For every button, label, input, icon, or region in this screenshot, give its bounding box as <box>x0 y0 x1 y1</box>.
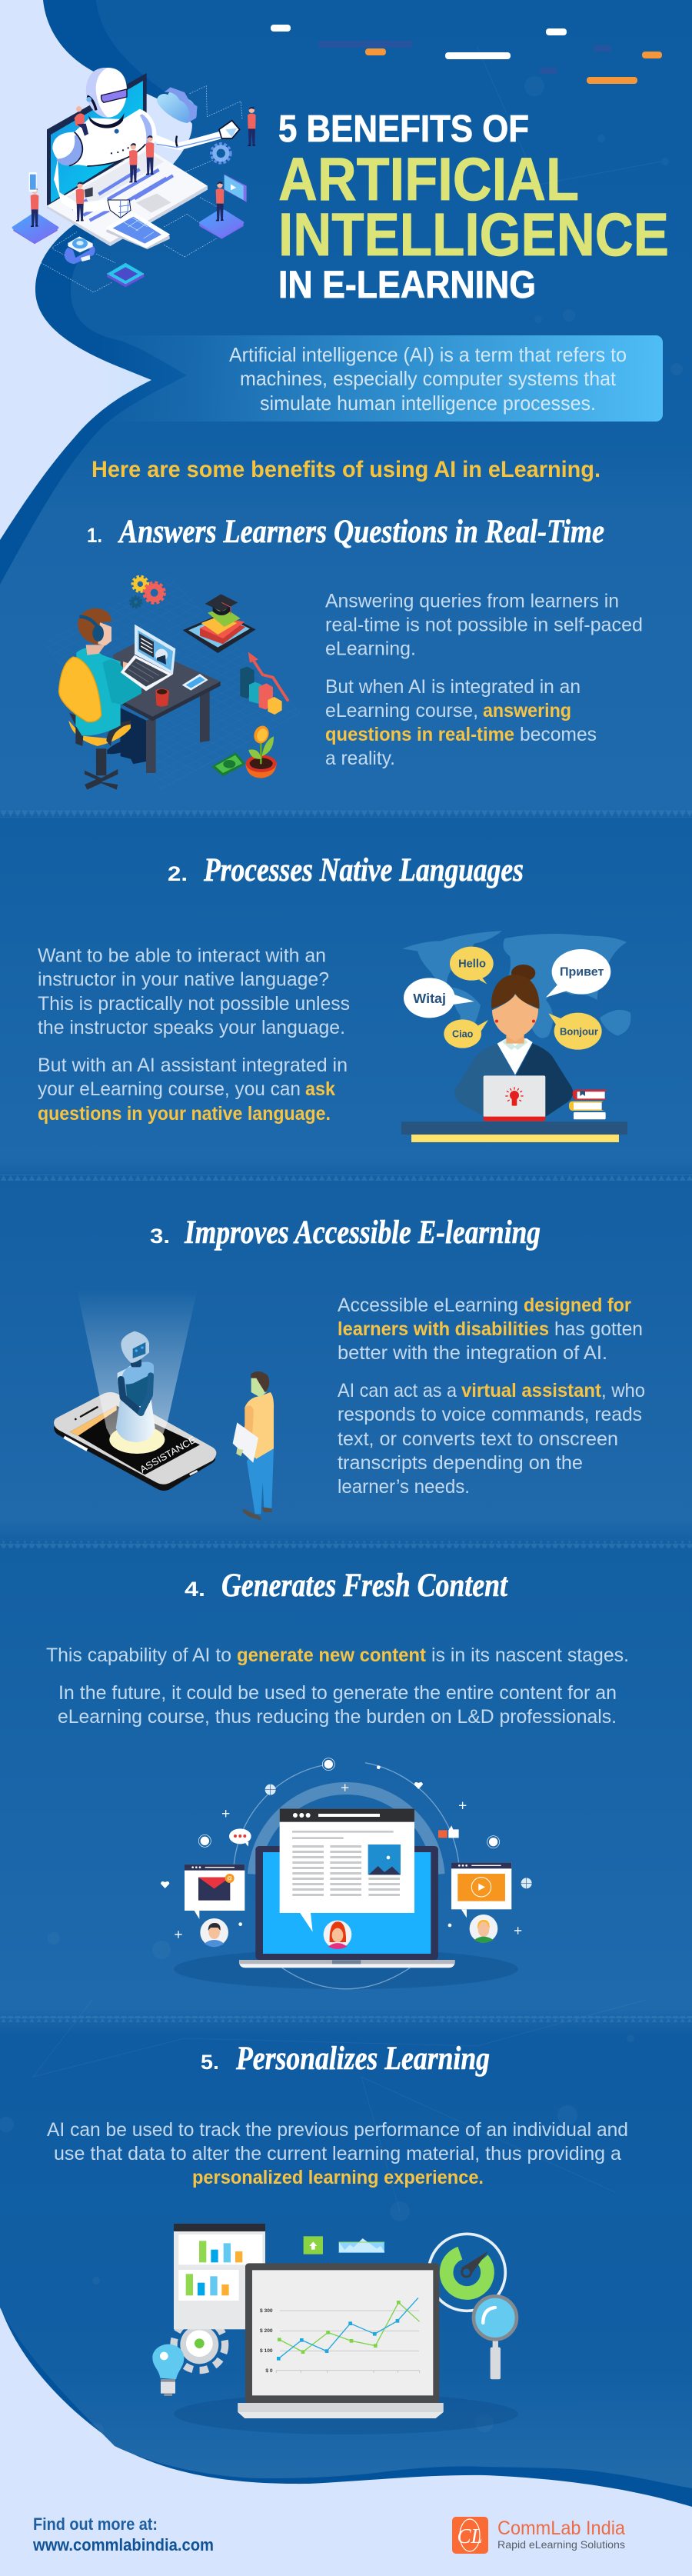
logo wordmark: CommLab India <box>497 2518 625 2539</box>
learner head with headset <box>78 608 111 655</box>
section 1 text: a reality. <box>325 748 395 769</box>
section 3 text: text, or converts text to onscreen <box>338 1428 618 1450</box>
platform: right <box>199 210 244 239</box>
speech bubble: Witaj: Witaj <box>413 991 446 1006</box>
gear icon <box>211 144 230 162</box>
title <box>278 108 669 306</box>
callout: definition of AI: machines, especially computer systems that <box>240 367 617 390</box>
lightbulb <box>152 2344 184 2396</box>
section 2 text: questions in your native language. <box>38 1103 331 1125</box>
small phone icon <box>29 172 37 192</box>
standing man <box>233 1371 274 1521</box>
ground shadow <box>174 1949 518 1989</box>
plant with coin and money <box>211 724 277 778</box>
section 2 text: ask <box>305 1078 335 1100</box>
speedometer gauge <box>428 2234 505 2311</box>
orbit arcs <box>234 1763 459 1989</box>
section 3 text: Accessible eLearning <box>338 1295 518 1316</box>
section 2 text: But with an AI assistant integrated in <box>38 1055 348 1076</box>
section 3 text: responds to voice commands, reads <box>338 1404 642 1425</box>
title line: In E-Learning: IN E-LEARNING <box>278 263 536 306</box>
logo tagline: Rapid eLearning Solutions <box>497 2538 625 2551</box>
small widgets <box>304 2236 384 2254</box>
section 2 illustration: instructor speaking many languages <box>401 931 630 1142</box>
section 2 text <box>38 945 350 1125</box>
speech bubble: Ciao: Ciao <box>452 1029 474 1040</box>
report panel <box>174 2224 265 2329</box>
section 3 text: has gotten <box>554 1318 643 1340</box>
phone body <box>54 1392 216 1491</box>
laptop on desk <box>121 625 175 691</box>
section 3 text: learners with disabilities <box>338 1318 549 1340</box>
watch icon <box>65 236 95 264</box>
laptop with lightbulb <box>484 1075 545 1121</box>
section 3 heading: Improves Accessible E-learning <box>184 1215 541 1251</box>
section 5 text <box>47 2119 628 2188</box>
bar chart with arrow <box>240 651 288 715</box>
section 5 text: AI can be used to track the previous performance of an individual and <box>47 2119 628 2141</box>
section 4 text: is in its nascent stages. <box>431 1645 629 1666</box>
analytics laptop <box>238 2263 444 2418</box>
smartphone on laptop <box>106 213 170 249</box>
video window <box>451 1862 511 1918</box>
section 3 text: , who <box>601 1380 645 1401</box>
speech bubble: Ciao <box>444 1019 488 1048</box>
title line: Artificial: ARTIFICIAL <box>278 145 579 213</box>
section 1 text: answering <box>483 700 571 721</box>
line chart: $ 200 <box>260 2328 273 2334</box>
monitor screen <box>47 73 147 208</box>
hero illustration: robot emerging from laptop <box>13 68 256 292</box>
main content window <box>280 1808 414 1932</box>
robot body <box>52 109 240 218</box>
section 1 text: Answering queries from learners in <box>325 591 619 612</box>
speech bubble: Bonjour <box>548 1013 602 1050</box>
section 5 heading: Personalizes Learning <box>235 2041 490 2077</box>
platform: left <box>13 213 58 244</box>
callout: definition of AI: Artificial intelligence (AI) is a term that refers to <box>229 343 627 366</box>
section 3 text: virtual assistant <box>461 1380 602 1401</box>
section 2 text: Want to be able to interact with an <box>38 945 326 966</box>
ground shadow <box>174 2394 518 2434</box>
dashes: decorative top bars <box>271 25 662 84</box>
section 2 heading: 2. <box>168 862 188 885</box>
line chart: $ 0 <box>265 2368 273 2374</box>
chair back <box>59 657 101 722</box>
section 3 text: designed for <box>524 1295 631 1316</box>
section 4 text: generate new content <box>237 1645 427 1666</box>
robot head <box>86 68 127 118</box>
glowing base <box>109 1425 165 1454</box>
section 2 text: instructor in your native language? <box>38 968 329 990</box>
line chart <box>260 2298 420 2374</box>
speech bubble: Hello <box>450 947 494 984</box>
email window <box>185 1865 245 1919</box>
gear <box>174 2319 225 2371</box>
section 3 text <box>338 1295 645 1498</box>
assistance label: ASSISTANCE <box>138 1435 198 1475</box>
gears <box>130 576 165 608</box>
section 2 text: the instructor speaks your language. <box>38 1017 345 1038</box>
tablet with books and cap <box>183 594 256 653</box>
chair <box>68 713 131 790</box>
desk legs and learner legs <box>107 687 210 773</box>
section 2 text: your eLearning course, you can <box>38 1078 301 1100</box>
section 5 illustration: analytics laptop <box>152 2224 518 2434</box>
coffee cup and phone <box>155 674 208 707</box>
footer call to action: Find out more at: <box>33 2514 158 2534</box>
section 1 text: eLearning. <box>325 638 416 660</box>
section 1 text <box>325 591 643 769</box>
cloud icon <box>157 87 198 123</box>
desk <box>401 1121 627 1142</box>
avatars <box>200 1915 497 1949</box>
world map <box>402 931 630 1038</box>
speech bubble: Bonjour: Bonjour <box>560 1026 598 1037</box>
section 1 text: becomes <box>520 724 597 745</box>
section 1 heading: Answers Learners Questions in Real-Time <box>117 514 604 550</box>
section 4 text: This capability of AI to <box>46 1645 231 1666</box>
section 3 text: transcripts depending on the <box>338 1452 583 1474</box>
learner torso <box>75 648 152 736</box>
light beam <box>77 1290 198 1446</box>
instructor figure <box>454 965 573 1117</box>
logo mark: CL <box>457 2524 483 2548</box>
callout: definition of AI: simulate human intelligence processes. <box>260 392 596 415</box>
title line: 5 Benefits of: 5 BENEFITS OF <box>278 108 529 150</box>
section 1 text: eLearning course, <box>325 700 478 721</box>
magnifying glass <box>474 2296 517 2379</box>
section 4 text: eLearning course, thus reducing the burden on L&D professionals. <box>58 1706 617 1728</box>
section 4 text <box>46 1645 629 1728</box>
email window: @ <box>227 1875 232 1882</box>
speech bubble: Privet <box>546 949 610 998</box>
small icons <box>161 1758 532 1938</box>
logo mark <box>452 2517 488 2554</box>
section 1 text: questions in real-time <box>325 724 514 745</box>
line chart: $ 300 <box>260 2308 273 2314</box>
footer call to action: www.commlabindia.com <box>32 2535 214 2554</box>
dotted network lines <box>41 86 242 292</box>
speech bubble: Witaj <box>404 978 474 1018</box>
section 1 heading: 1. <box>87 524 102 547</box>
section 1 illustration: learner at desk <box>44 576 300 790</box>
section 3 text: AI can act as a <box>338 1380 457 1401</box>
section 5 text: personalized learning experience. <box>192 2167 484 2188</box>
chip icon <box>107 263 144 287</box>
line chart: $ 100 <box>260 2348 273 2354</box>
section 3 text: learner’s needs. <box>338 1476 470 1498</box>
speech bubble: Hello: Hello <box>458 958 486 970</box>
section 2 heading: Processes Native Languages <box>203 852 524 888</box>
section 3 illustration: phone assistant robot <box>54 1290 274 1521</box>
section 4 text: In the future, it could be used to generate the entire content for an <box>58 1682 617 1704</box>
section 5 text: use that data to alter the current learning material, thus providing a <box>54 2143 621 2164</box>
speech bubble: Privet: Привет <box>560 966 604 979</box>
gear hub over panel edge <box>186 2330 213 2357</box>
section 1 text: But when AI is integrated in an <box>325 676 581 698</box>
section 4 heading: Generates Fresh Content <box>221 1568 509 1604</box>
laptop base <box>47 148 208 246</box>
section 3 text: better with the integration of AI. <box>338 1342 607 1364</box>
section 5 heading: 5. <box>201 2051 219 2074</box>
people <box>31 106 256 227</box>
section 4 illustration: laptop with content windows <box>161 1758 532 1989</box>
callout: definition of AI <box>100 335 663 422</box>
intro line: Here are some benefits of using AI in eLearning. <box>91 457 601 482</box>
play tile <box>225 175 247 202</box>
footer call to action <box>32 2514 214 2554</box>
stack of books <box>569 1090 607 1119</box>
logo: CommLab India <box>452 2517 625 2554</box>
desk top <box>113 644 221 721</box>
laptop <box>239 1846 455 1968</box>
hologram robot <box>116 1331 155 1442</box>
section 4 heading: 4. <box>185 1578 205 1601</box>
section 1 text: real-time is not possible in self-paced <box>325 614 643 635</box>
section 2 text: This is practically not possible unless <box>38 993 350 1015</box>
section 3 heading: 3. <box>150 1225 170 1248</box>
isometric floor grid <box>44 577 300 790</box>
